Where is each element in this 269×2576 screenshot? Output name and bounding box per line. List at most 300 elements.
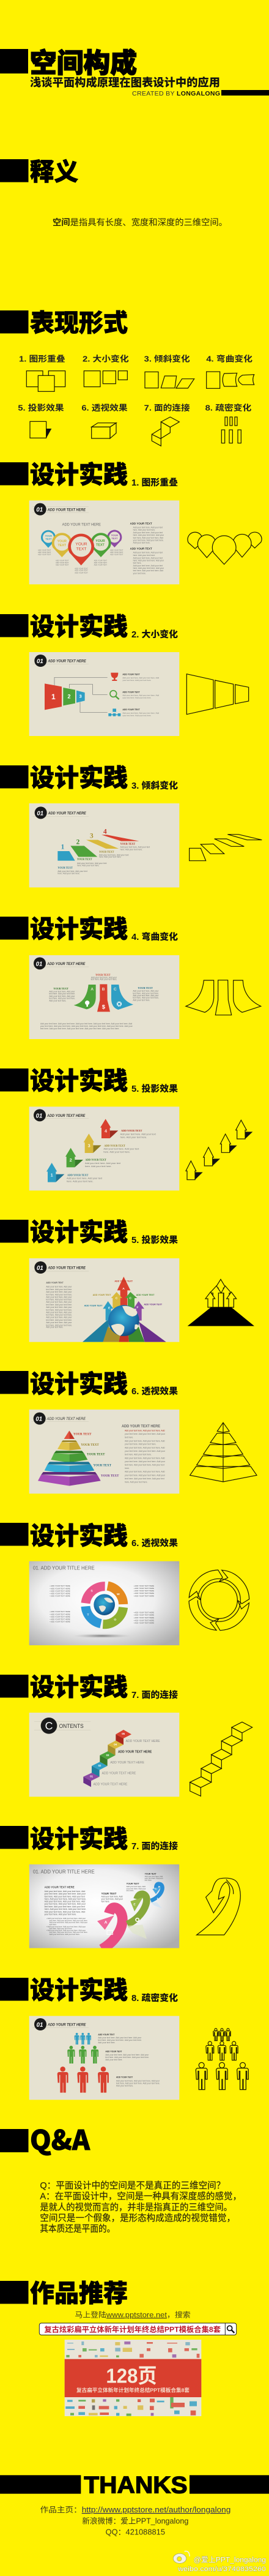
- slide: contents stairs: ADD YOUR TEXT HERE: [102, 1772, 136, 1776]
- slide: tilted planes: 4: [103, 828, 107, 835]
- slide: ribbon arrows: Add your text here. Add your text here. Add: [45, 1901, 85, 1903]
- icon: outlined curved bands: [186, 980, 261, 1015]
- slide: pin chart: ADD YOUR TEXT: [94, 563, 107, 566]
- slide: pin chart: YOUR: [95, 539, 105, 543]
- slide: curved bands: YOUR TEXT: [53, 987, 68, 990]
- slide: people pyramid: ADD YOUR TEXT: [116, 2076, 133, 2079]
- slide: people pyramid: Add your text here.: [116, 2084, 133, 2087]
- slide: funnel chart: your text here. Add your text here.: [122, 714, 152, 716]
- slide: ribbon arrows: 01. ADD YOUR TITLE HERE: [33, 1869, 95, 1874]
- text block: question and answer: [40, 2180, 241, 2234]
- slide: pin chart: YOUR: [111, 533, 118, 536]
- slide: funnel chart: Add your text here. Add your text here. Add: [122, 694, 159, 697]
- slide: pin chart: text here. Add your text here. Add: [133, 569, 163, 572]
- slide: people pyramid: Add your text here. Add your text here. Add your: [105, 2054, 149, 2056]
- icon: outlined tilted planes: [190, 835, 262, 861]
- slide: ribbon arrows: YOUR TEXT: [127, 1882, 139, 1885]
- slide: people pyramid: ADD YOUR TEXT: [105, 2050, 122, 2052]
- slide: SWOT ring: • ADD YOUR TEXT HERE: [134, 1590, 154, 1592]
- heading: 设计实践: [30, 607, 128, 642]
- heading: 设计实践: [30, 1819, 128, 1855]
- icon: outlined ring segments: [189, 1570, 249, 1631]
- slide: pin chart: ADD YOUR TEXT: [130, 547, 152, 550]
- icon: outlined pins: [188, 532, 262, 565]
- slide: SWOT ring: S: [90, 1589, 93, 1593]
- slide: curved bands: text here. Add your text here.: [91, 978, 117, 981]
- slide: SWOT ring: • ADD YOUR TEXT HERE: [50, 1587, 70, 1590]
- search box: [39, 2323, 237, 2335]
- section: practice 1 overlap: [0, 455, 262, 584]
- slide: funnel chart: Add your text here. Add your text here. Add: [122, 712, 159, 714]
- slide: pin chart: TEXT: [45, 538, 52, 541]
- slide: stepped arrows: ADD YOUR TEXT HERE: [46, 1114, 86, 1118]
- label 6: 6. 透视效果: [81, 402, 128, 412]
- slide: 3D pyramid: Add your text here. Add your text here. Add: [125, 1440, 165, 1442]
- slide: SWOT ring: • ADD YOUR TEXT HERE: [134, 1621, 154, 1624]
- slide: pin chart: TEXT: [58, 544, 67, 547]
- slide: ribbon arrows: your text here. Add your text here. Add your: [45, 1893, 86, 1895]
- slide: curved bands: Add your text here. Add your: [49, 990, 75, 993]
- slide: curved bands: ADD YOUR TEXT HERE: [46, 962, 86, 966]
- section: practice 5 shadow arrows: [0, 1061, 252, 1190]
- slide: ribbon arrows: • Add your text here. Add your text here. Add your: [46, 1917, 86, 1920]
- slide: curved bands: text here. Add your text here.: [49, 997, 75, 1000]
- section: practice 2 size: [0, 607, 249, 736]
- slide: stepped arrows: Add your text here. Add your text: [120, 1133, 157, 1136]
- slide: curved bands: C: [114, 987, 117, 991]
- slide: stepped arrows: 2: [70, 1157, 72, 1163]
- slide: pin chart: ADD YOUR TEXT: [56, 561, 69, 564]
- slide: globe and arrows: E: [108, 1306, 111, 1310]
- slide: 3D pyramid: your text here. Add your text here. Add your: [125, 1474, 166, 1476]
- slide: funnel chart: ADD YOUR TEXT: [122, 708, 141, 711]
- section: practice 7b ribbons: [0, 1819, 240, 1949]
- slide: tilted planes: YOUR TEXT: [57, 866, 73, 869]
- slide: tilted planes: here. Add your text here.: [120, 849, 142, 851]
- slide: ribbon arrows: here. Add your text here. Add your text here.: [45, 1908, 86, 1910]
- slide: people pyramid: [29, 2016, 179, 2100]
- slide: pin chart: ADD YOUR TEXT: [38, 554, 51, 556]
- slide: ribbon arrows: text here. Add your text here. Add your text here.: [50, 1919, 88, 1921]
- slide: 3D pyramid: here. Add your text here.: [125, 1481, 148, 1484]
- slide: funnel chart: Add your text here. Add your text here. Add: [122, 677, 159, 679]
- icon: connected faces: [152, 417, 179, 446]
- slide: pin chart: your text here.: [133, 572, 146, 574]
- heading: [0, 1667, 179, 1703]
- slide: curved bands: Add your text here. Add your text here. Add your text here. Add your text here. Add your text here. Add: [40, 1023, 132, 1025]
- slide: stepped arrows: here. Add your text here.: [67, 1180, 94, 1183]
- slide: globe and arrows: text here. Add your text here.: [46, 1314, 72, 1316]
- icon: perspective cube: [92, 423, 116, 438]
- section: practice 8 density: [0, 1970, 248, 2100]
- heading: [0, 455, 178, 490]
- slide: 3D pyramid: text here. Add your text here.: [125, 1454, 152, 1456]
- slide: pin chart: YOUR: [57, 539, 67, 543]
- section heading: 释义: 释义: [30, 152, 78, 187]
- heading: 4. 弯曲变化: [131, 931, 179, 942]
- icon: outlined people: [196, 2029, 248, 2090]
- slide: SWOT ring: • ADD YOUR TEXT HERE: [50, 1610, 70, 1613]
- slide: stepped arrows: 3: [88, 1143, 90, 1149]
- slide: globe and arrows: text here. Add your text here.: [46, 1324, 72, 1326]
- slide: ribbon arrows: Add your text here. Add: [127, 1885, 146, 1888]
- slide: SWOT ring: [29, 1561, 179, 1645]
- slide: globe and arrows: Add your text here. Add your: [46, 1321, 72, 1324]
- icon: size change squares: [84, 371, 127, 387]
- slide: contents stairs: ONTENTS: [59, 1723, 84, 1729]
- slide: contents stairs: [29, 1713, 179, 1797]
- heading: [0, 1516, 179, 1552]
- slide: ribbon arrows: Add your text here. Add your text here. Add: [45, 1910, 85, 1913]
- section heading: Q&A: [0, 2119, 90, 2158]
- heading: 7. 面的连接: [131, 1841, 179, 1852]
- slide: ribbon arrows: your text here. Add your: [127, 1888, 146, 1890]
- slide: globe and arrows: Add your text here.: [46, 1326, 64, 1329]
- slide: SWOT ring: • ADD YOUR TEXT HERE: [134, 1614, 154, 1617]
- heading: 6. 透视效果: [131, 1386, 179, 1397]
- slide: 3D pyramid: text here.: [125, 1436, 133, 1439]
- slide: ribbon arrows: text here. Add your text here. Add your text: [45, 1895, 85, 1898]
- heading: [0, 1061, 179, 1097]
- slide: curved bands: your text here. Add your text here. Add your text here. Add your text here. Add your text here. Add your: [40, 1025, 133, 1027]
- slide: SWOT ring: • ADD YOUR TEXT HERE: [50, 1595, 70, 1598]
- slide: ribbon arrows: C: [155, 1887, 157, 1890]
- slide: 3D pyramid: ADD YOUR TEXT HERE: [122, 1425, 160, 1429]
- slide: funnel chart: ADD YOUR TEXT HERE: [47, 659, 86, 663]
- slide: ribbon arrows: • Add your text here. Add your text here. Add your: [46, 1929, 86, 1931]
- slide: curved bands: A: [90, 987, 94, 991]
- slide: tilted planes: Add your text here. Add your text: [77, 862, 107, 865]
- slide: stepped arrows: here. Add your text here.: [85, 1165, 112, 1168]
- slide: ribbon arrows: your text here. Add your text here.: [45, 1913, 76, 1915]
- slide: pin chart: ADD YOUR TEXT: [56, 563, 69, 566]
- slide: ribbon arrows: ADD YOUR TEXT HERE: [45, 1885, 75, 1888]
- slide: people pyramid: Add your text here.: [105, 2059, 123, 2061]
- slide: funnel chart: 01: [37, 658, 43, 665]
- heading: 2. 大小变化: [131, 629, 179, 640]
- slide: people pyramid: text here. Add your text here. Add your text here.: [98, 2039, 142, 2041]
- heading: 1. 图形重叠: [131, 477, 178, 488]
- slide: ribbon arrows: your text here. Add your text here. Add your: [45, 1903, 86, 1906]
- slide: stepped arrows: ADD YOUR TEXT: [67, 1173, 89, 1176]
- slide: SWOT ring: • ADD YOUR TEXT HERE: [134, 1617, 154, 1619]
- slide: ribbon arrows: [29, 1864, 179, 1949]
- slide: ribbon arrows: here. Add your text here. Add your text here.: [45, 1898, 86, 1900]
- heading: 设计实践: [30, 909, 128, 945]
- slide: curved bands: text here. Add your text here. Add your text here. Add your text here. Add your text here.: [40, 1027, 119, 1030]
- slide: stepped arrows: Add your text here. Add your text: [67, 1177, 103, 1180]
- icon: outlined ribbon arrow: [197, 1878, 240, 1935]
- slide: curved bands: YOUR TEXT: [138, 986, 153, 989]
- slide: globe and arrows: text here. Add your text here.: [46, 1299, 72, 1301]
- heading: [0, 607, 179, 642]
- slide: ribbon arrows: YOUR TEXT: [145, 1872, 157, 1875]
- slide: ribbon arrows: Add your text here. Add your text here.: [50, 1933, 80, 1936]
- slide: contents stairs: 01: [90, 1774, 94, 1778]
- slide: ribbon arrows: Add your text here. Add your text here. Add your: [50, 1921, 87, 1924]
- slide: ribbon arrows: $: [157, 1897, 159, 1900]
- section heading: 作品推荐: 作品推荐: [30, 2274, 128, 2309]
- text block: contact info: [40, 2506, 230, 2536]
- slide: contents stairs: 04: [114, 1743, 117, 1746]
- watermark: weibo: weibo.com/u/3740835260: [177, 2566, 266, 2573]
- slide: people pyramid: Add your text here. Add your text here. Add your: [116, 2079, 160, 2082]
- slide: tilted planes: here. Add your text here.: [77, 865, 100, 867]
- slide: curved bands: Add your text here.: [49, 999, 67, 1002]
- slide: pin chart: text here.: [133, 562, 142, 565]
- search box: 复古炫彩扁平立体新年计划年终总结PPT模板合集8套: [44, 2324, 221, 2334]
- label 7: 7. 面的连接: [144, 402, 190, 412]
- slide: 3D pyramid: Add your text here. Add your text here. Add: [125, 1457, 165, 1459]
- slide: stepped arrows: 4: [105, 1128, 108, 1134]
- slide: pin chart: TEXT: [96, 544, 105, 547]
- text block: contact info: 作品主页：http://www.pptstore.net/author/longalong: [40, 2506, 230, 2514]
- slide: curved bands: [29, 955, 179, 1039]
- heading: [0, 1364, 179, 1400]
- text block: question and answer: A：在平面设计中，空间是一种具有深度感的感觉，: [40, 2191, 241, 2202]
- slide: contents stairs: ADD YOUR TEXT HERE: [118, 1751, 152, 1754]
- label 4: 4. 弯曲变化: [206, 354, 252, 364]
- label 5: 5. 投影效果: [18, 402, 64, 412]
- slide: pin chart: ADD YOUR TEXT: [75, 571, 88, 574]
- slide: pin chart: ADD YOUR TEXT: [75, 567, 88, 569]
- slide: pin chart: 01: [36, 507, 43, 514]
- slide: funnel chart: your text here. Add your text here.: [122, 679, 152, 682]
- slide: SWOT ring: • ADD YOUR TEXT HERE: [50, 1615, 70, 1618]
- slide: ribbon arrows: E: [133, 1903, 136, 1907]
- section heading: 释义: [0, 152, 78, 187]
- icon: weibo eye: [173, 2551, 190, 2563]
- section: practice 6b ring: [0, 1516, 249, 1645]
- heading: 设计实践: [30, 455, 128, 490]
- slide: globe and arrows: Add your text here. Add your: [46, 1306, 72, 1309]
- slide: pin chart: Add your text here. Add your text: [133, 557, 163, 559]
- slide: ribbon arrows: text here.: [145, 1879, 152, 1882]
- slide: ribbon arrows: A: [105, 1921, 108, 1925]
- slide: curved bands: B: [102, 987, 105, 991]
- slide: ribbon arrows: YOUR TEXT: [101, 1892, 117, 1895]
- slide: people pyramid: ADD YOUR TEXT HERE: [47, 2022, 86, 2027]
- slide: curved bands: text here. Add your text here.: [49, 993, 75, 995]
- slide: 3D pyramid: text here. Add your text here. Add your text: [125, 1463, 164, 1466]
- section: practice 5b globe arrows: [0, 1212, 254, 1342]
- slide: 3D pyramid: text here. Add your text here. Add your text: [125, 1478, 164, 1480]
- slide: SWOT ring: • ADD YOUR TEXT HERE: [50, 1585, 70, 1587]
- label 8: 8. 疏密变化: [205, 402, 251, 412]
- slide: contents stairs: 05: [122, 1732, 125, 1735]
- slide: globe and arrows: ADD YOUR TEXT: [114, 1280, 133, 1282]
- slide: tilted planes: [29, 803, 179, 887]
- slide: curved bands: $: [102, 1004, 106, 1010]
- slide: globe and arrows: text here. Add your text here.: [46, 1319, 72, 1321]
- slide: tilted planes: here. Add your text here.: [57, 873, 80, 875]
- slide: globe and arrows: Add your text here. Add your: [46, 1311, 72, 1313]
- text block: question and answer: Q：平面设计中的空间是不是真正的三维空间？: [40, 2180, 225, 2191]
- slide: pin chart: TEXT: [111, 537, 118, 540]
- heading: 设计实践: [30, 1061, 128, 1097]
- heading: 8. 疏密变化: [131, 1992, 179, 2003]
- slide: ribbon arrows: your text here. Add your: [145, 1877, 163, 1880]
- slide: people pyramid: text here. Add your text here. Add your text here.: [116, 2082, 160, 2084]
- slide: stepped arrows: Add your text here. Add your text: [85, 1162, 121, 1165]
- slide: curved bands: text here. Add your text here.: [133, 997, 159, 999]
- watermark: weibo: [173, 2551, 266, 2573]
- slide: globe and arrows: Add your text here. Add your: [46, 1296, 72, 1298]
- product image: [65, 2340, 201, 2416]
- slide: 3D pyramid: YOUR TEXT: [101, 1474, 119, 1478]
- slide: pin chart: here. Add your text here. Add your: [133, 559, 164, 561]
- label 3: 3. 倾斜变化: [144, 354, 190, 364]
- slide: curved bands: Add your text here. Add your: [133, 990, 159, 993]
- slide: tilted planes: 3: [90, 832, 94, 839]
- icon: outlined arrows on black road: [188, 1279, 254, 1326]
- slide: pin chart: ADD YOUR TEXT: [110, 551, 123, 554]
- watermark: weibo: @爱上PPT_longalong: [194, 2555, 266, 2564]
- slide: ribbon arrows: your text here. Add your: [101, 1898, 123, 1900]
- slide: contents stairs: ADD YOUR TEXT HERE: [110, 1761, 145, 1765]
- slide: globe and arrows: C: [130, 1297, 132, 1301]
- closing banner: thanks: [0, 2472, 269, 2499]
- slide: globe and arrows: ADD YOUR TEXT: [144, 1304, 163, 1306]
- slide: globe and arrows: Add your text here. Add your: [46, 1316, 72, 1319]
- slide: tilted planes: YOUR TEXT: [99, 850, 114, 853]
- slide: SWOT ring: • ADD YOUR TEXT HERE: [134, 1612, 154, 1614]
- slide: people pyramid: 01: [37, 2022, 43, 2029]
- slide: stepped arrows: Add your text here. Add your text: [103, 1147, 139, 1151]
- slide: pin chart: ADD YOUR TEXT: [38, 551, 51, 554]
- icon: outlined arrows with shadow: [186, 1120, 252, 1180]
- icon: overlapping squares: [26, 371, 65, 391]
- slide: pin chart: here. Add your text here.: [133, 554, 155, 557]
- slide: pin chart: here. Add your text here.: [133, 528, 155, 531]
- slide: pin chart: ADD YOUR TEXT: [110, 549, 123, 552]
- heading: 6. 透视效果: [131, 1538, 179, 1549]
- slide: pin chart: ADD YOUR TEXT: [56, 560, 69, 562]
- slide: tilted planes: ADD YOUR TEXT HERE: [48, 811, 86, 816]
- closing banner: thanks: THANKS: [84, 2472, 188, 2499]
- slide: tilted planes: YOUR TEXT: [120, 843, 135, 846]
- slide: globe and arrows: Add your text here. Add your: [46, 1286, 72, 1288]
- slide: pin chart: TEXT: [76, 547, 87, 551]
- title block: [0, 41, 269, 97]
- byline bar: [221, 90, 269, 96]
- slide: SWOT ring: • ADD YOUR TEXT HERE: [134, 1592, 154, 1594]
- heading: 设计实践: [30, 1516, 128, 1552]
- heading: 设计实践: [30, 758, 128, 794]
- slide: 3D pyramid: ADD YOUR TEXT HERE: [46, 1417, 86, 1421]
- heading: 设计实践: [30, 1970, 128, 2006]
- slide: funnel chart: 1: [51, 693, 56, 701]
- slide: tilted planes: 2: [76, 838, 80, 846]
- product image: 128页: [106, 2365, 157, 2388]
- slide: ribbon arrows: Add your text here. Add: [145, 1876, 163, 1878]
- section: practice 3 tilt: [0, 758, 262, 887]
- text block: question and answer: 空间只是一个假象，是形态构成造成的视觉错觉，: [40, 2213, 235, 2223]
- slide: funnel chart: ADD YOUR TEXT: [122, 674, 141, 676]
- slide: funnel chart: 2: [67, 693, 70, 699]
- icon: outlined stairs: [190, 1722, 252, 1796]
- slide: pin chart: ADD YOUR TEXT: [94, 561, 107, 564]
- slide: SWOT ring: • ADD YOUR TEXT HERE: [50, 1621, 70, 1623]
- slide: stepped arrows: here. Add your text here.: [103, 1151, 130, 1154]
- slide: stepped arrows: here. Add your text here.: [120, 1136, 147, 1139]
- slide: funnel chart: your text here. Add your text here.: [122, 697, 152, 699]
- slide: ribbon arrows: text here. Add your text here. Add your text here.: [50, 1931, 88, 1934]
- section: practice 6 pyramid: [0, 1364, 257, 1493]
- slide: pin chart: text here. Add your text here. Add: [133, 536, 163, 539]
- slide: contents stairs: 02: [98, 1764, 101, 1767]
- slide: globe and arrows: Add your text here. Add your: [46, 1301, 72, 1304]
- heading: [0, 1970, 179, 2006]
- slide: globe and arrows: text here. Add your text here.: [46, 1288, 72, 1291]
- text block: contact info: QQ：421088815: [106, 2528, 165, 2536]
- slide: 3D pyramid: your text here. Add your text here. Add your: [125, 1433, 166, 1435]
- slide: 3D pyramid: YOUR TEXT: [94, 1465, 112, 1468]
- slide: pin chart: here. Add your text here. Add your: [133, 534, 164, 536]
- slide: ribbon arrows: Add your text here. Add: [101, 1895, 123, 1898]
- slide: pin chart: Add your text here. Add your text: [133, 531, 163, 534]
- heading: 设计实践: [30, 1364, 128, 1400]
- heading: [0, 909, 179, 945]
- slide: curved bands: text here. Add your text here.: [133, 992, 159, 994]
- slide: contents stairs: C: [45, 1720, 53, 1732]
- byline: CREATED BY LONGALONG: [132, 90, 220, 97]
- slide: 3D pyramid: YOUR TEXT: [87, 1454, 105, 1457]
- slide: SWOT ring: • ADD YOUR TEXT HERE: [50, 1618, 70, 1620]
- slide: stepped arrows: [29, 1106, 179, 1190]
- slide: globe and arrows: F: [136, 1306, 139, 1310]
- slide: funnel chart: [29, 652, 179, 736]
- slide: pin chart: ADD YOUR TEXT: [130, 522, 152, 525]
- slide: ribbon arrows: text here. Add your text here. Add your text: [45, 1906, 85, 1908]
- slide: pin chart: Add your text here. Add your text: [133, 526, 163, 528]
- slide: ribbon arrows: Add your text here. Add your text here. Add: [45, 1890, 85, 1893]
- slide: globe and arrows: Add your text here. Add your: [46, 1291, 72, 1293]
- slide: globe and arrows: ADD YOUR TEXT: [84, 1304, 103, 1307]
- slide: globe and arrows: ADD YOUR TEXT: [46, 1282, 64, 1284]
- slide: globe and arrows: text here. Add your text here.: [46, 1304, 72, 1306]
- slide: curved bands: 01: [36, 961, 42, 967]
- slide: 3D pyramid: your text here. Add your text here. Add your: [125, 1460, 166, 1463]
- heading: 5. 投影效果: [131, 1083, 179, 1094]
- slide: contents stairs: ADD YOUR TEXT HERE: [94, 1782, 128, 1786]
- slide: people pyramid: Add your text here. Add your text here. Add your: [98, 2037, 142, 2039]
- slide: tilted planes: YOUR TEXT: [77, 858, 92, 861]
- slide: 3D pyramid: Add your text here. Add your text here. Add: [125, 1429, 165, 1432]
- slide: pin chart: Add your text here. Add your text: [133, 565, 163, 567]
- slide: people pyramid: text here. Add your text here. Add your text here.: [105, 2056, 149, 2059]
- slide: globe and arrows: ADD YOUR TEXT HERE: [47, 1266, 86, 1271]
- slide: globe and arrows: text here. Add your text here.: [46, 1293, 72, 1296]
- slide: tilted planes: 1: [61, 843, 65, 851]
- panel: eight forms grid: [18, 354, 254, 446]
- heading: [0, 1819, 179, 1855]
- slide: 3D pyramid: [29, 1410, 179, 1493]
- slide: 3D pyramid: 01: [35, 1416, 42, 1423]
- slide: tilted planes: Add your text here. Add your text: [120, 846, 150, 849]
- icon: tilted shapes: [145, 372, 194, 388]
- slide: SWOT ring: • ADD YOUR TEXT HERE: [134, 1585, 154, 1587]
- slide: pin chart: your text here. Add your text here.: [133, 539, 164, 541]
- slide: pin chart: YOUR: [45, 535, 52, 538]
- slide: pin chart: Add your text here. Add your text: [133, 552, 163, 554]
- text block: contact info: 新浪微博：爱上PPT_longalong: [82, 2516, 188, 2525]
- slide: tilted planes: Add your text here. Add your text: [99, 854, 129, 856]
- slide: SWOT ring: 01. ADD YOUR TITLE HERE: [33, 1566, 95, 1571]
- slide: pin chart: ADD YOUR TEXT: [110, 554, 123, 556]
- definition text: 空间是指具有长度、宽度和深度的三维空间。: [53, 217, 227, 228]
- heading: [0, 1212, 179, 1248]
